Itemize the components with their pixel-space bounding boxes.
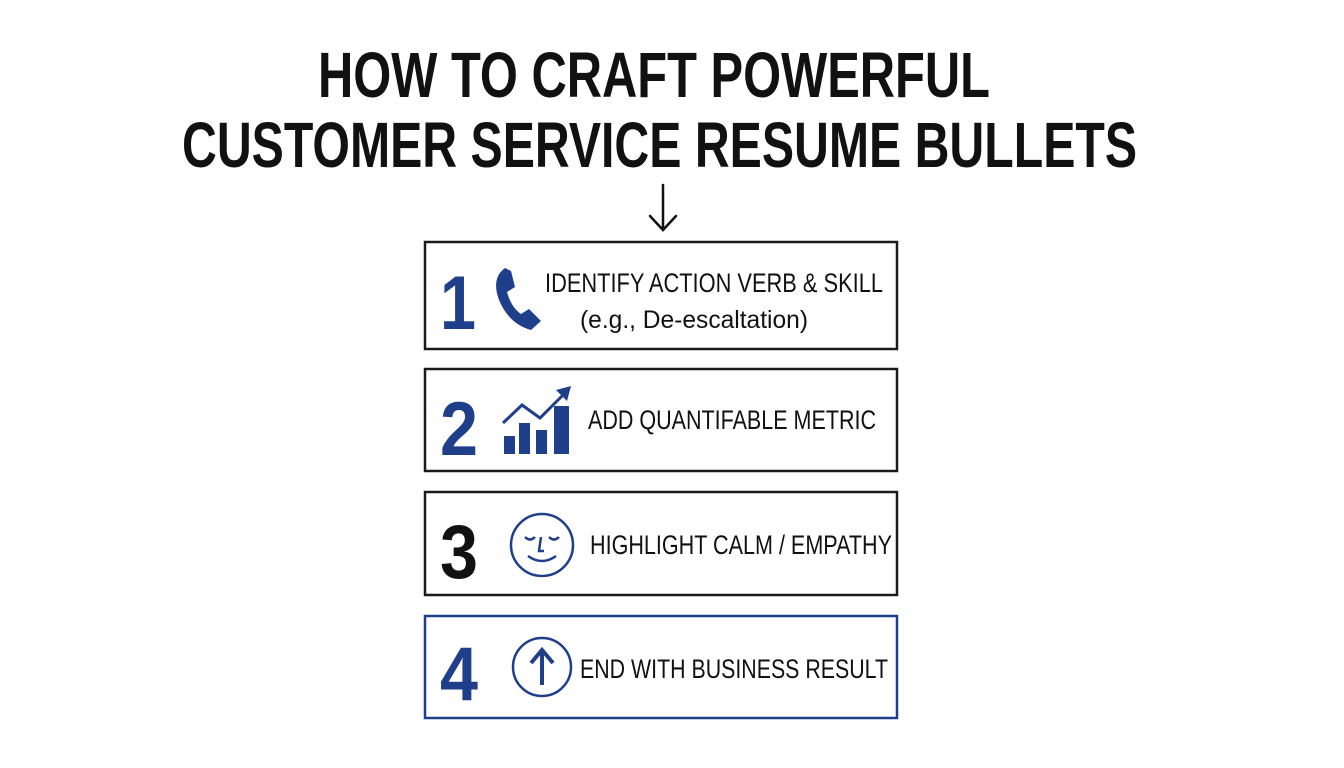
panel: step 1: (e.g., De-escaltation)	[580, 306, 808, 334]
number 4: 4	[440, 632, 478, 717]
text block: END WITH BUSINESS RESULT	[580, 654, 888, 684]
title	[182, 39, 1137, 181]
arrow: down	[650, 185, 676, 230]
number 1: 1	[440, 261, 476, 346]
number 3: 3	[440, 510, 478, 595]
panel: step 3	[425, 492, 897, 595]
number 2: 2	[440, 387, 478, 472]
panel: step 1	[425, 242, 897, 349]
icon: calm face	[511, 514, 573, 576]
icon: chart	[503, 386, 571, 454]
panel: step 2	[425, 369, 897, 472]
panel: step 4	[425, 616, 897, 718]
text block: IDENTIFY ACTION VERB & SKILL	[545, 268, 883, 298]
icon: phone	[496, 268, 541, 330]
title: HOW TO CRAFT POWERFUL	[318, 39, 990, 111]
icon: up arrow circle	[513, 638, 571, 696]
text block: HIGHLIGHT CALM / EMPATHY	[590, 530, 892, 560]
text block: ADD QUANTIFABLE METRIC	[588, 405, 876, 435]
